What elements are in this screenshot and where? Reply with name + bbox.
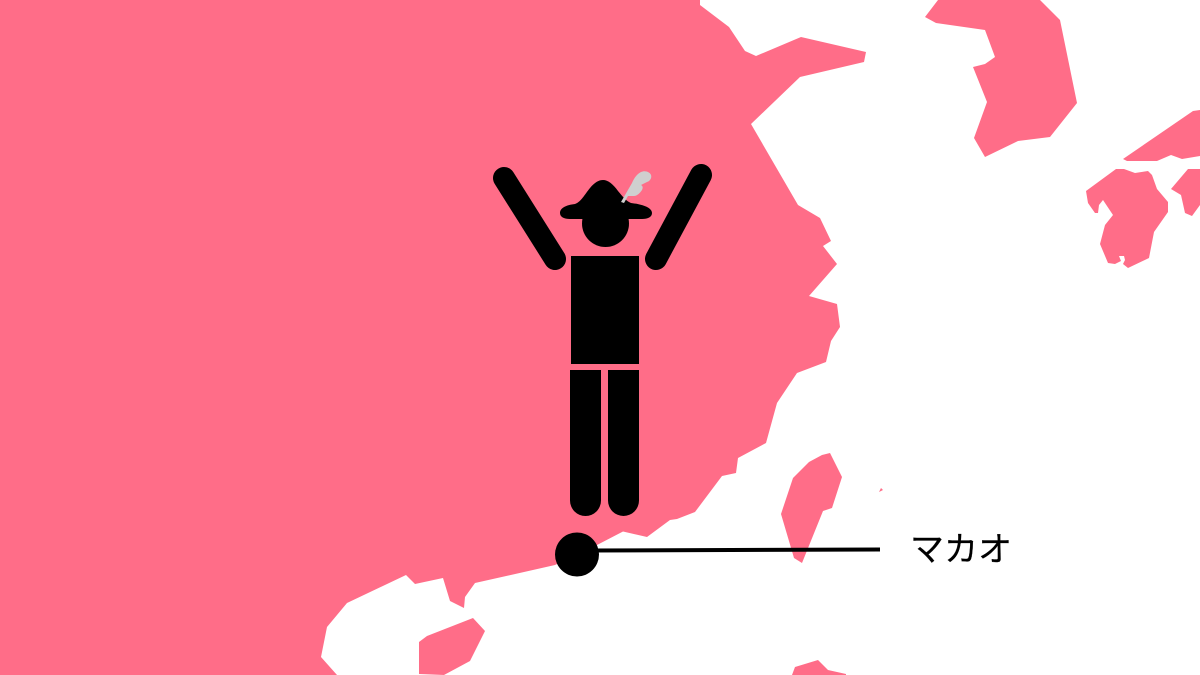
- left arm: [504, 178, 555, 259]
- landmass: Kyushu: [1086, 169, 1168, 268]
- pictogram: person with raised arms and feathered hat: [504, 171, 701, 516]
- landmass: Honshu: [1123, 110, 1200, 161]
- location marker: Macau: [555, 532, 599, 576]
- right leg: [608, 370, 639, 516]
- left leg: [570, 370, 601, 516]
- landmass: mainland China: [0, 0, 866, 675]
- head: [582, 200, 629, 247]
- label: Macau: マカオ: [910, 531, 1012, 569]
- landmass: Taiwan: [781, 453, 842, 563]
- landmass: Hainan: [419, 618, 485, 675]
- hat: [560, 180, 652, 219]
- landmass: Shikoku: [1171, 169, 1200, 216]
- torso: [571, 256, 639, 364]
- landmass: Philippines: [792, 660, 846, 675]
- leader line: [590, 550, 880, 551]
- right arm: [656, 175, 701, 259]
- landmass: small island: [879, 488, 883, 492]
- feather: [621, 171, 651, 203]
- landmass: Korean Peninsula: [925, 0, 1077, 157]
